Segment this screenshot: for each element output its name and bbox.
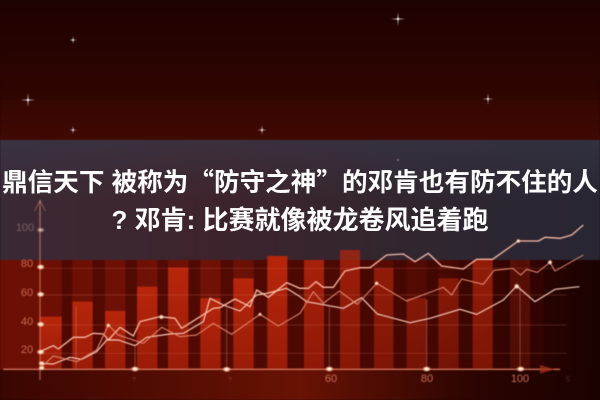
line series B [40, 286, 579, 364]
axis labels: 80 [21, 258, 33, 270]
axis labels: ? [132, 377, 136, 384]
title line 2: ? 邓肯: 比赛就像被龙卷风追着跑 [112, 205, 488, 235]
axis labels [16, 222, 571, 385]
stars [21, 12, 494, 161]
axis labels: 100 [511, 373, 529, 385]
axis labels: 5 [566, 375, 571, 384]
axis labels: 60 [21, 287, 33, 299]
grey title band [0, 140, 600, 260]
axis labels: 60 [325, 373, 337, 385]
axis labels: ? [228, 377, 232, 384]
axis labels: 80 [421, 373, 433, 385]
axis labels: 40 [21, 316, 33, 328]
grid and axes [3, 200, 567, 380]
axis labels: 100 [16, 222, 34, 234]
data points [36, 227, 553, 372]
axis labels: 20 [21, 344, 33, 356]
bar chart [40, 250, 543, 368]
red chart field [0, 260, 600, 370]
title line 1: 鼎信天下 被称为“防守之神”的邓肯也有防不住的人 [2, 162, 598, 199]
bottom strip [0, 370, 600, 400]
line chart [40, 225, 583, 368]
line series C [40, 255, 583, 368]
starry sky [0, 0, 600, 141]
line series A [40, 225, 583, 352]
